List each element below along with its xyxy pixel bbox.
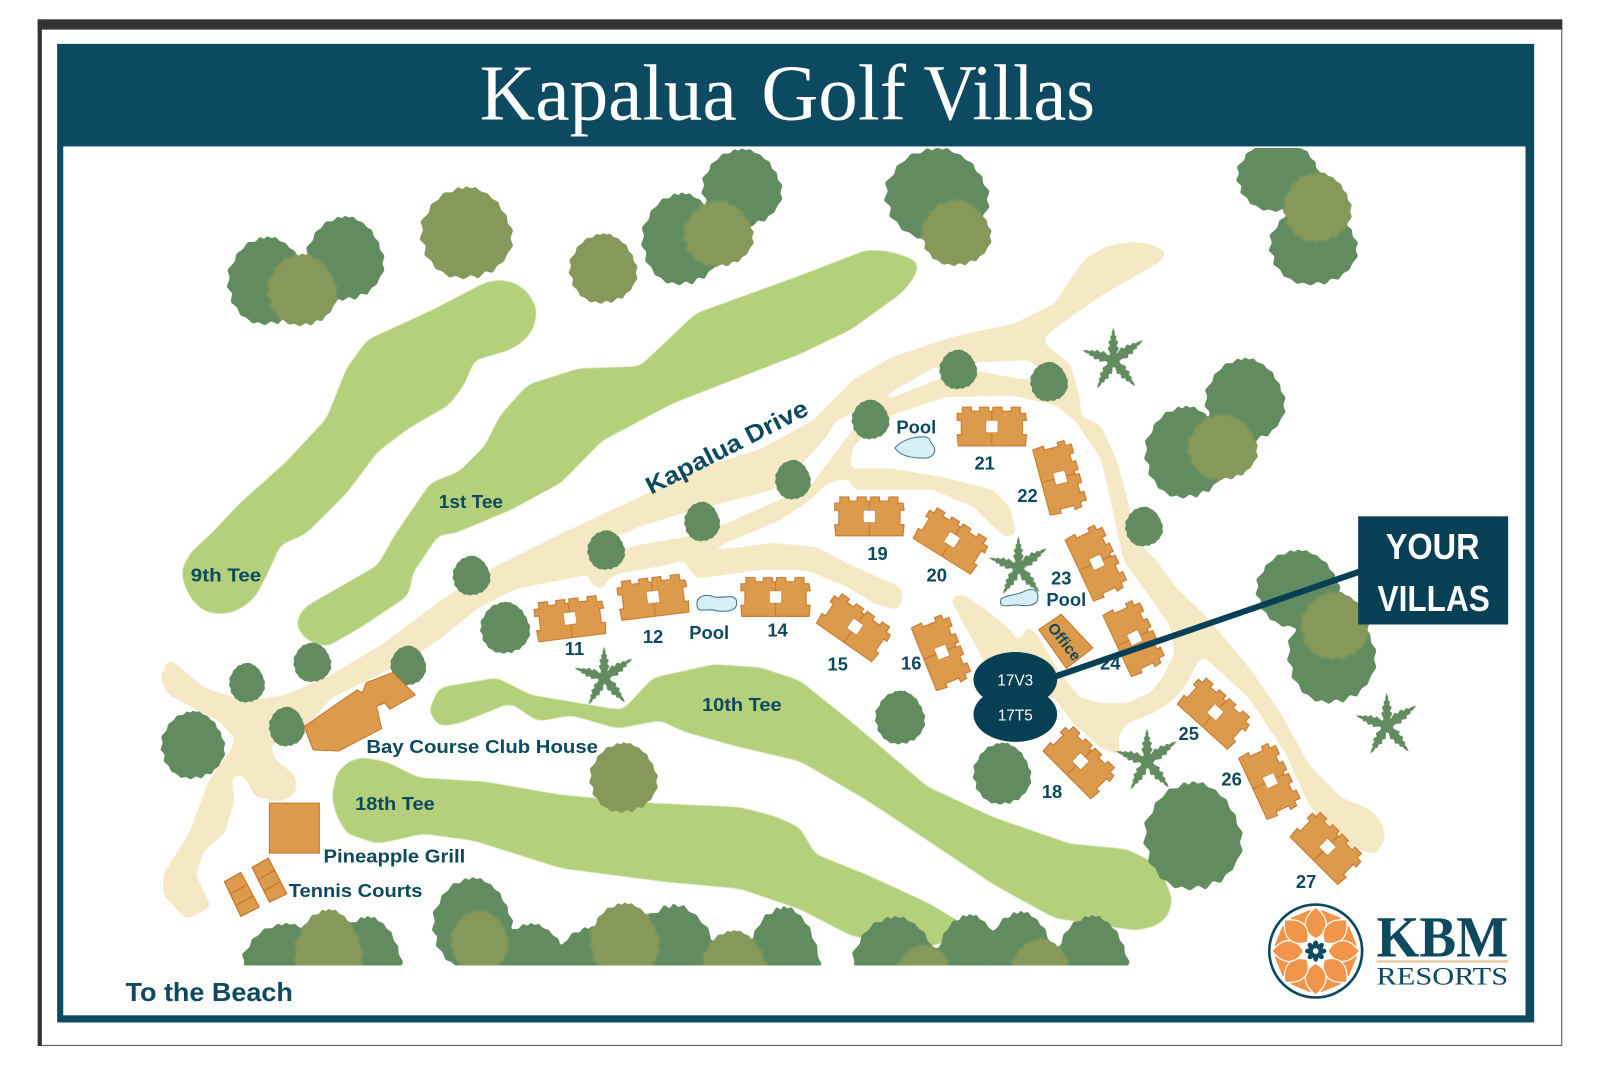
- building numbers: 27: [1296, 871, 1316, 892]
- tree: olive small: [568, 233, 638, 304]
- logo: KBM Resorts: RESORTS: [1377, 962, 1508, 991]
- logo: KBM Resorts: [1269, 905, 1508, 997]
- building numbers: [565, 452, 1316, 892]
- villa marker: 17V3: 17V3: [997, 673, 1033, 690]
- logo emblem: [1269, 905, 1362, 997]
- building numbers: 15: [828, 653, 848, 674]
- map labels: 1st Tee: [439, 491, 503, 512]
- callout box: your villas: YOUR: [1386, 527, 1480, 567]
- map labels: 18th Tee: [355, 793, 435, 814]
- map labels: 10th Tee: [702, 694, 782, 715]
- map labels: Pool: [1046, 589, 1086, 610]
- villa marker: 17T5: [973, 687, 1057, 742]
- trees: along the road: [160, 349, 1243, 891]
- fairway: 10th hole: [429, 664, 1172, 931]
- building numbers: 20: [927, 565, 947, 586]
- pool near building 21: [895, 437, 935, 458]
- tree: olive: [419, 186, 513, 280]
- title: [480, 49, 1095, 137]
- building: Bay Course Club House: [304, 672, 415, 751]
- building numbers: 14: [767, 620, 789, 641]
- building: Office: [1039, 614, 1093, 668]
- building numbers: 12: [643, 626, 663, 647]
- map panel background: [63, 146, 1526, 1015]
- building numbers: 21: [974, 452, 995, 473]
- trees: right cluster: [1144, 357, 1286, 499]
- pool between 12 and 14: [697, 595, 737, 611]
- fairway: 9th hole: [182, 280, 537, 614]
- map labels: Pool: [689, 622, 729, 643]
- building numbers: 25: [1179, 723, 1199, 744]
- building numbers: 24: [1100, 652, 1121, 673]
- trees: top-left cluster: [227, 215, 385, 327]
- tennis courts: [224, 858, 287, 916]
- fairway: 1st hole: [297, 250, 919, 647]
- callout box: your villas: [1358, 516, 1508, 625]
- building numbers: 19: [867, 543, 888, 564]
- fairway: 18th hole: [332, 757, 980, 949]
- trees: top-centre cluster: [641, 148, 783, 286]
- tree row along the bottom: [242, 877, 1130, 966]
- villa marker: 17V3: [973, 652, 1057, 707]
- map labels: Kapalua Drive: [641, 395, 813, 500]
- villa marker: 17T5: 17T5: [998, 707, 1033, 724]
- building numbers: 16: [901, 652, 921, 673]
- map labels: To the Beach: [126, 979, 293, 1007]
- label: Office: Office: [1044, 620, 1084, 665]
- title: Golf: [761, 49, 907, 137]
- pool near 23: [1001, 589, 1038, 606]
- building: Pineapple Grill: [269, 803, 319, 853]
- callout box: your villas: VILLAS: [1378, 579, 1490, 619]
- trees: top cluster: [884, 147, 992, 266]
- palms: [573, 328, 1420, 792]
- map labels: [126, 395, 1086, 1007]
- map labels: Tennis Courts: [289, 880, 422, 901]
- building numbers: 26: [1221, 769, 1242, 790]
- title: Kapalua: [480, 49, 737, 137]
- fairways: [182, 250, 1172, 949]
- callout: line to villas: [1055, 571, 1360, 677]
- roads: [160, 242, 1386, 919]
- building numbers: 23: [1051, 568, 1071, 589]
- trees: beside villas box: [1255, 549, 1377, 704]
- tree: olive on 18th fairway: [589, 742, 658, 813]
- map labels: Pineapple Grill: [323, 845, 465, 866]
- title: Villas: [923, 49, 1095, 137]
- map labels: Pool: [896, 417, 936, 438]
- building numbers: 18: [1042, 781, 1062, 802]
- building numbers: 22: [1017, 485, 1038, 506]
- logo: KBM Resorts: KBM: [1377, 905, 1508, 970]
- map labels: Bay Course Club House: [366, 736, 598, 757]
- villa buildings: [533, 407, 1366, 885]
- trees: top-right cluster: [1236, 139, 1358, 286]
- building numbers: 11: [565, 638, 584, 659]
- map labels: 9th Tee: [191, 565, 261, 586]
- all trees: [160, 139, 1377, 1046]
